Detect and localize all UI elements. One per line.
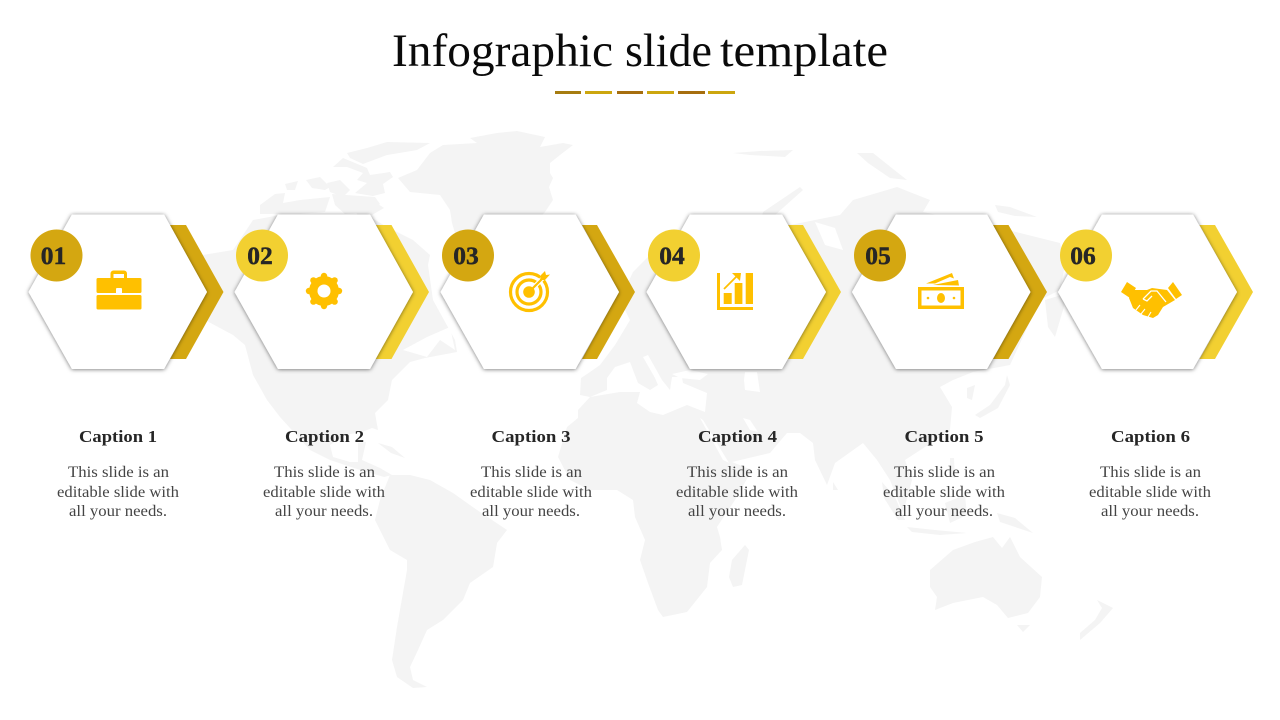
description 3: editable slide with [470,484,592,501]
description 4: This slide is an [687,464,788,481]
chevron 3 [582,225,635,359]
description 6: This slide is an [1100,464,1201,481]
title: template [720,25,888,77]
badge 06 [1060,230,1112,282]
caption 4: Caption 4 [698,427,777,446]
step 5 [852,214,1047,520]
badge 05: 05 [865,241,891,270]
description 3: all your needs. [482,503,580,520]
badge 04: 04 [659,241,685,270]
badge 03: 03 [453,241,479,270]
description 6: editable slide with [1089,484,1211,501]
hexagon 5 [852,214,1030,369]
description 3 [470,464,592,520]
icon: handshake [1121,282,1182,318]
description 1 [57,464,179,520]
description 4: editable slide with [676,484,798,501]
chevron 2 [376,225,429,359]
hexagon 4 [646,214,826,369]
description 4: all your needs. [688,503,786,520]
description 1: This slide is an [68,464,169,481]
chevron 6 [1200,225,1253,359]
title [392,25,888,77]
title: slide [625,25,712,77]
badge 01 [30,230,82,282]
step 1 [28,214,224,520]
icon: briefcase [96,270,142,310]
chevron 5 [993,225,1047,359]
description 5 [883,464,1005,520]
caption 2: Caption 2 [285,427,364,446]
description 1: all your needs. [69,503,167,520]
badge 01: 01 [41,241,66,270]
caption 5: Caption 5 [904,427,984,446]
description 6 [1089,464,1211,520]
background world map [203,131,1113,688]
badge 06: 06 [1070,241,1096,270]
seas [590,222,843,463]
step 3 [440,214,635,520]
icon: target [510,271,550,310]
description 3: This slide is an [481,464,582,481]
description 6: all your needs. [1101,503,1199,520]
description 1: editable slide with [57,484,179,501]
title: Infographic [392,25,613,77]
description 5: editable slide with [883,484,1005,501]
hexagon 2 [234,214,413,369]
icon: banknotes [918,273,964,309]
description 2: This slide is an [274,464,375,481]
title underline dashes [555,91,735,94]
chevron 4 [788,225,841,359]
description 5: all your needs. [895,503,993,520]
caption 6: Caption 6 [1111,427,1190,446]
hexagon 3 [440,214,619,369]
icon: bar chart [717,273,753,310]
step 6 [1058,214,1253,520]
step 2 [234,214,429,520]
description 2 [263,464,385,520]
badge 02 [236,230,288,282]
description 4 [676,464,798,520]
step 4 [646,214,841,520]
eurasia and africa [558,187,1065,617]
south america [375,475,507,688]
caption 3: Caption 3 [492,427,570,446]
north america [203,215,457,477]
hexagon 6 [1058,214,1237,369]
description 2: all your needs. [275,503,373,520]
icon: gear [306,273,342,309]
hexagon 1 [28,214,207,369]
caption 1: Caption 1 [79,427,157,446]
badge 05 [854,230,906,282]
badge 04 [648,230,700,282]
chevron 1 [170,225,224,359]
badge 03 [442,230,494,282]
description 2: editable slide with [263,484,385,501]
badge 02: 02 [247,241,273,270]
description 5: This slide is an [894,464,995,481]
